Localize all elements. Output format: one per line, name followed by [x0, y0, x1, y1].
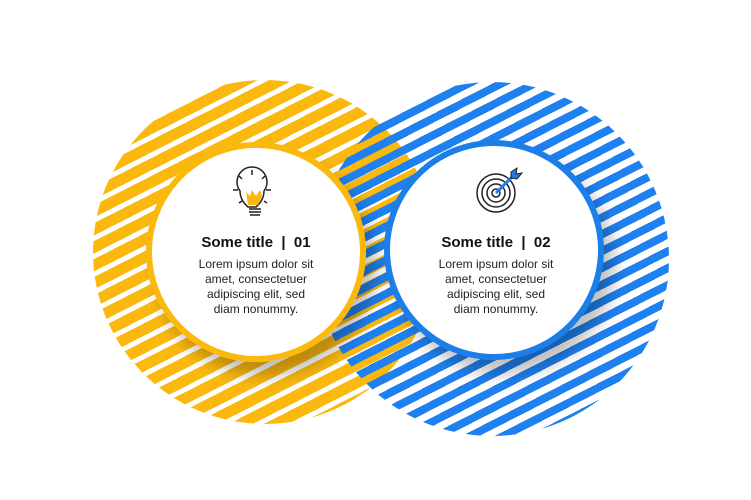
- text block 1: diam nonummy.: [214, 302, 298, 316]
- icon: target: [477, 168, 522, 212]
- text block 2: diam nonummy.: [454, 302, 538, 316]
- text block 2: Lorem ipsum dolor sit: [439, 257, 553, 271]
- text block 1: adipiscing elit, sed: [207, 287, 305, 301]
- icon: light bulb: [233, 167, 271, 215]
- text block 1: amet, consectetuer: [205, 272, 307, 286]
- outer blue striped circle: [315, 82, 669, 436]
- text block 2: Some title | 02: [441, 234, 551, 251]
- inner circle 1: [146, 142, 366, 362]
- text block 1: Lorem ipsum dolor sit: [199, 257, 313, 271]
- outer yellow striped circle: [93, 80, 437, 424]
- text block 1: Some title | 01: [201, 234, 311, 251]
- text block 1: [199, 234, 314, 316]
- inner circle 2: [384, 140, 604, 360]
- text block 2: amet, consectetuer: [445, 272, 547, 286]
- text block 2: [439, 234, 554, 316]
- text block 2: adipiscing elit, sed: [447, 287, 545, 301]
